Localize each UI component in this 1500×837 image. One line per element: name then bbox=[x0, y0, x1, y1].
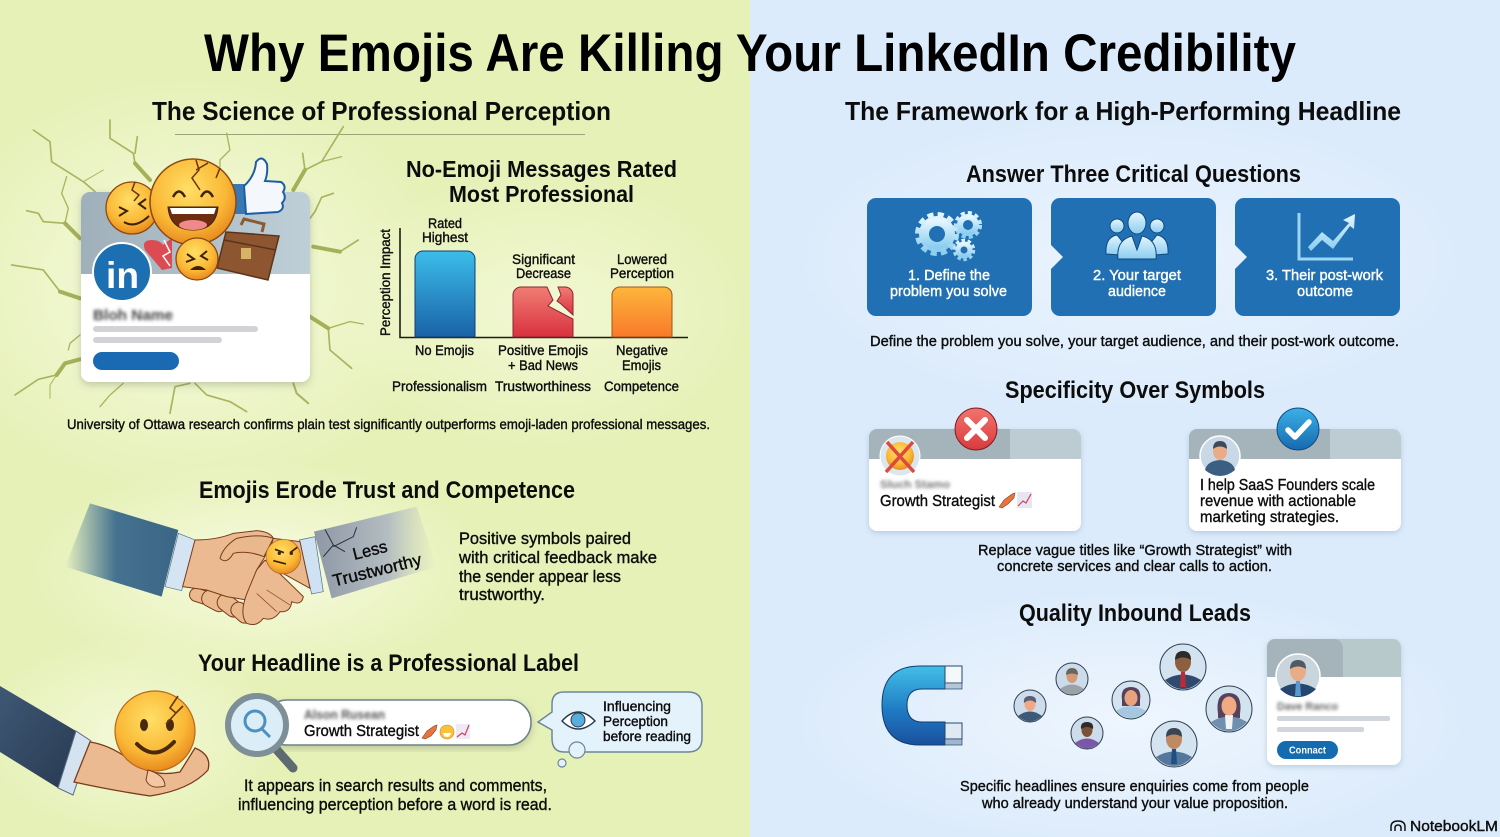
icon: gears bbox=[918, 213, 980, 260]
icon: eye bbox=[562, 712, 595, 729]
category labels: Emojis bbox=[622, 357, 661, 373]
profile card bbox=[81, 192, 310, 382]
icon: red cross bbox=[955, 408, 997, 450]
icon: people bbox=[1106, 212, 1168, 259]
lead avatars bbox=[1014, 644, 1252, 767]
card: bad headline bbox=[869, 429, 1081, 531]
icon: blue check bbox=[1277, 408, 1319, 450]
illustration: hand holding emoji bbox=[0, 686, 209, 796]
chart heading bbox=[406, 156, 677, 207]
left sleeve bbox=[65, 503, 178, 597]
profile card: Bloh Name bbox=[93, 307, 173, 324]
search result pill bbox=[265, 700, 531, 745]
label: less trustworthy bbox=[326, 530, 424, 591]
heading: inbound leads: Quality Inbound Leads bbox=[1019, 600, 1251, 627]
card: post-work outcome: outcome bbox=[1297, 283, 1353, 300]
card: post-work outcome: 3. Their post-work bbox=[1266, 267, 1383, 284]
search result pill: Growth Strategist bbox=[304, 723, 420, 740]
bar annotations bbox=[422, 215, 674, 281]
text: specificity explanation: Replace vague titles like “Growth Strategist” with bbox=[978, 542, 1292, 559]
icon: LinkedIn badge: in bbox=[106, 255, 139, 296]
axes bbox=[400, 228, 688, 338]
category labels: Trustworthiness bbox=[495, 378, 591, 394]
card: connect profile: Dave Ranco bbox=[1277, 701, 1338, 713]
right section heading: The Framework for a High-Performing Headline bbox=[845, 96, 1401, 126]
avatar 5 bbox=[1160, 644, 1206, 690]
heading: three questions: Answer Three Critical Questions bbox=[966, 161, 1301, 188]
category labels: Competence bbox=[604, 378, 679, 394]
bar chart bbox=[377, 215, 688, 394]
callout: influencing perception: Perception bbox=[603, 713, 668, 729]
text: specificity explanation: concrete services and clear calls to action. bbox=[997, 558, 1272, 575]
bar annotations: Highest bbox=[422, 229, 468, 245]
axis title: Perception Impact bbox=[377, 229, 393, 336]
category labels: Negative bbox=[616, 342, 668, 358]
callout: influencing perception: before reading bbox=[603, 728, 691, 744]
callout: influencing perception bbox=[538, 692, 702, 767]
text: trust explanation: the sender appear less bbox=[459, 567, 621, 586]
card: define the problem: problem you solve bbox=[890, 283, 1007, 300]
avatar 1 bbox=[1014, 690, 1046, 722]
icon: thumbs up bbox=[232, 158, 285, 214]
clasped hands bbox=[183, 531, 310, 626]
category labels: + Bad News bbox=[508, 357, 578, 373]
avatar 7 bbox=[1151, 721, 1197, 767]
research note: University of Ottawa research confirms plain test significantly outperforms emoji-laden professional messages. bbox=[67, 416, 710, 432]
callout: influencing perception: Influencing bbox=[603, 698, 671, 714]
search result pill: Alson Rusean bbox=[304, 707, 385, 722]
avatar 6 bbox=[1206, 686, 1252, 732]
panel: right background bbox=[750, 0, 1500, 837]
label: less trustworthy: Less bbox=[351, 537, 389, 564]
category labels bbox=[392, 342, 679, 394]
icon: magnet bbox=[882, 666, 962, 745]
avatar: crossed emoji bbox=[880, 436, 920, 476]
bar annotations: Decrease bbox=[516, 265, 571, 281]
text: trust explanation: Positive symbols paired bbox=[459, 529, 631, 548]
right sleeve bbox=[299, 507, 437, 598]
text: leads explanation: who already understand your value proposition. bbox=[981, 795, 1288, 812]
heading: trust and competence: Emojis Erode Trust and Competence bbox=[199, 477, 575, 504]
chart heading: No-Emoji Messages Rated bbox=[406, 156, 677, 182]
connect button: Connact bbox=[1289, 746, 1327, 756]
heading: professional label: Your Headline is a Professional Label bbox=[198, 650, 579, 677]
icon: angry emoji bbox=[266, 539, 301, 574]
bar annotations: Perception bbox=[610, 265, 674, 281]
title: Why Emojis Are Killing Your LinkedIn Credibility bbox=[204, 24, 1296, 83]
avatar: professional bbox=[1200, 436, 1240, 476]
panel: left background bbox=[0, 0, 750, 837]
text: trust explanation: trustworthy. bbox=[459, 585, 545, 604]
card: good headline: marketing strategies. bbox=[1200, 509, 1339, 526]
card: define the problem bbox=[867, 198, 1032, 316]
text: headline explanation bbox=[238, 776, 552, 814]
icon: LinkedIn badge bbox=[93, 243, 151, 301]
avatar 4 bbox=[1112, 681, 1150, 719]
text: headline explanation: It appears in search results and comments, bbox=[244, 776, 547, 795]
label: less trustworthy: Trustworthy bbox=[331, 550, 424, 591]
text: trust explanation bbox=[458, 529, 657, 604]
card: target audience bbox=[1051, 198, 1216, 316]
avatar 3 bbox=[1071, 717, 1103, 749]
text: leads explanation: Specific headlines ensure enquiries come from people bbox=[960, 778, 1309, 795]
wall cracks bbox=[12, 120, 363, 413]
text: trust explanation: with critical feedback make bbox=[458, 548, 657, 567]
illustration: handshake bbox=[65, 503, 437, 626]
icon: rocket bbox=[422, 725, 437, 739]
category labels: Positive Emojis bbox=[498, 342, 588, 358]
card: define the problem: 1. Define the bbox=[908, 267, 990, 284]
bar: negative emojis bbox=[612, 287, 672, 337]
icon: growth chart bbox=[1299, 213, 1355, 259]
card: good headline: I help SaaS Founders scale bbox=[1200, 477, 1375, 494]
card: connect profile bbox=[1267, 639, 1401, 765]
text: questions summary: Define the problem you solve, your target audience, and their post-work outcome. bbox=[870, 333, 1399, 350]
bar annotations: Significant bbox=[512, 251, 575, 267]
icon: grin bbox=[440, 725, 454, 739]
chart heading: Most Professional bbox=[449, 181, 634, 207]
text: specificity explanation bbox=[978, 542, 1292, 575]
card: target audience: audience bbox=[1108, 283, 1166, 300]
bar annotations: Lowered bbox=[617, 251, 667, 267]
category labels: No Emojis bbox=[415, 342, 474, 358]
icon: chart emoji bbox=[1017, 492, 1032, 508]
icon: chart emoji bbox=[456, 724, 470, 739]
bar annotations: Rated bbox=[428, 215, 462, 231]
icon: cracked laughing emoji bbox=[150, 159, 236, 245]
heading: specificity: Specificity Over Symbols bbox=[1005, 377, 1265, 404]
avatar: connect card bbox=[1276, 654, 1320, 698]
text: leads explanation bbox=[960, 778, 1309, 812]
icon: small angry emoji bbox=[176, 238, 218, 280]
left section heading: The Science of Professional Perception bbox=[152, 96, 611, 126]
NotebookLM watermark: NotebookLM bbox=[1410, 818, 1498, 835]
card: good headline: revenue with actionable bbox=[1200, 493, 1356, 510]
icon: broken heart bbox=[144, 238, 172, 270]
card: target audience: 2. Your target bbox=[1093, 267, 1182, 284]
icon: cracked smiley left bbox=[106, 182, 158, 234]
bar: no emojis bbox=[415, 251, 475, 337]
icon: rocket bbox=[999, 493, 1015, 508]
illustration: cracked LinkedIn profile card bbox=[12, 120, 363, 413]
bar: positive emojis with bad news bbox=[513, 287, 573, 337]
card: good headline bbox=[1189, 429, 1401, 531]
avatar 2 bbox=[1056, 663, 1088, 695]
category labels: Professionalism bbox=[392, 378, 487, 394]
icon: magnifying glass bbox=[228, 696, 293, 768]
icon: briefcase bbox=[217, 219, 279, 280]
card: bad headline: Sluch Stamo bbox=[880, 479, 950, 491]
card: post-work outcome bbox=[1235, 198, 1400, 316]
text: headline explanation: influencing perception before a word is read. bbox=[238, 795, 552, 814]
card: bad headline: Growth Strategist bbox=[880, 493, 996, 510]
